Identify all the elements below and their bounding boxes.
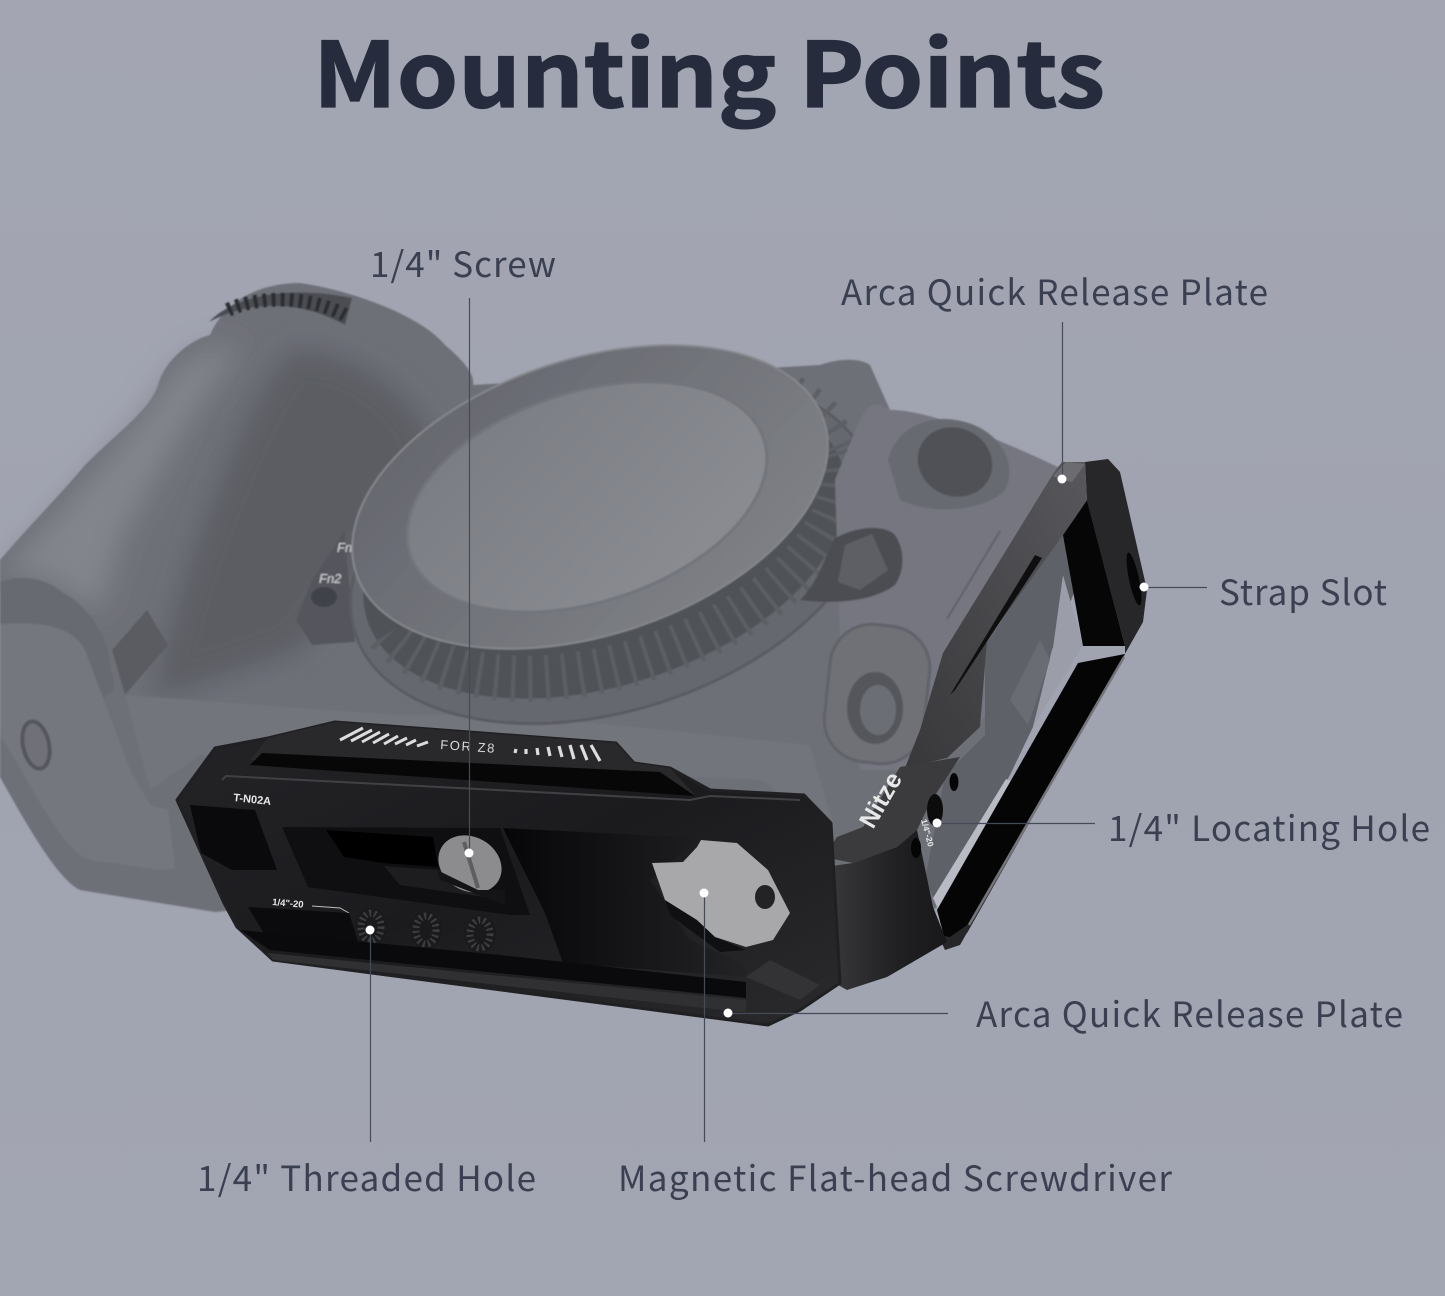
callout leader lines [370,298,1207,1142]
Nitze logo: Nitze [854,767,908,833]
hole label: 1/4"-20 [919,818,936,848]
grip highlight left [0,345,240,610]
window black band upper [1063,500,1125,646]
upper arm bevel [905,462,1087,768]
callout dots [366,474,1148,1018]
dovetail groove [240,930,746,998]
label: threaded hole: 1/4" Threaded Hole [197,1151,536,1202]
rail stripes left [340,728,428,746]
arm lower block [825,830,947,990]
lens cap inner disc [378,340,796,654]
side lug button [800,528,902,602]
Fn2 button [311,587,337,607]
strap slot [1123,552,1145,606]
frame outer light edge [969,657,1124,925]
window ledge [384,866,505,900]
label: screw: 1/4" Screw [370,237,556,288]
side dial shade [1010,640,1050,725]
label: locating hole: 1/4" Locating Hole [1108,801,1430,852]
bright gap strip [933,779,1013,909]
window slot [326,830,438,867]
ten-pin connector [847,672,903,744]
window black band diagonal [937,654,1125,940]
top dial on shoulder [888,419,1009,509]
magnetic screwdriver key [652,840,790,952]
grip shade [150,350,440,700]
battery door [0,623,175,870]
Fn1 label: Fn [337,540,352,555]
threaded holes [355,908,496,953]
rail stripes right [515,745,600,761]
L bracket vertical arm [823,459,1147,990]
lug top [838,534,888,590]
threaded label: 1/4"-20 [272,897,304,911]
shoulder crease [947,531,1000,619]
model text: T-N02A [233,792,272,808]
knurled cap ring [323,331,887,755]
arm top highlight [1053,462,1085,482]
left pocket [190,805,277,870]
body lower band [125,695,835,830]
Fn labels: Fn2 [319,571,342,586]
arm bevel shadow [950,555,1042,695]
dovetail lip [268,953,746,1012]
plate corner chamfer [746,960,820,1000]
title: Mounting Points [313,3,1105,133]
grip command dial [209,292,352,325]
connector surround [820,620,934,768]
Fn button recess [296,530,355,645]
label leader [312,906,349,913]
background gap in window [1033,575,1083,727]
side holes [911,773,958,858]
camera silhouette [0,283,1075,960]
quick release base plate [177,722,840,1025]
right body shoulder [835,404,1075,770]
label: strap slot: Strap Slot [1219,565,1387,616]
threaded groove [248,907,360,948]
lens cap outer face [313,290,867,704]
rail groove [250,753,695,796]
label: bottom arca plate: Arca Quick Release Plate [976,987,1403,1038]
door block upper [0,578,115,710]
ring teeth [371,378,850,701]
door latch [18,719,54,771]
FOR Z8 rail text: FOR Z8 [440,737,497,756]
lens mount flange [306,314,918,786]
plate face bevel [222,776,800,800]
plate body [177,722,840,1025]
large pocket [503,828,746,977]
side of camera seen through bracket [925,530,1075,905]
camera body, ghosted behind the bracket [0,283,1075,960]
Nitze top face [823,757,960,863]
label: top arca plate: Arca Quick Release Plate [841,265,1268,316]
quarter-inch screw head [428,824,512,905]
label: screwdriver: Magnetic Flat-head Screwdriver [618,1151,1172,1202]
dial cap [906,415,1004,509]
top rail [250,722,695,795]
frame right face [938,459,1147,950]
centre window [282,827,530,915]
dial knurling [228,300,345,315]
door notch strap [112,610,168,695]
